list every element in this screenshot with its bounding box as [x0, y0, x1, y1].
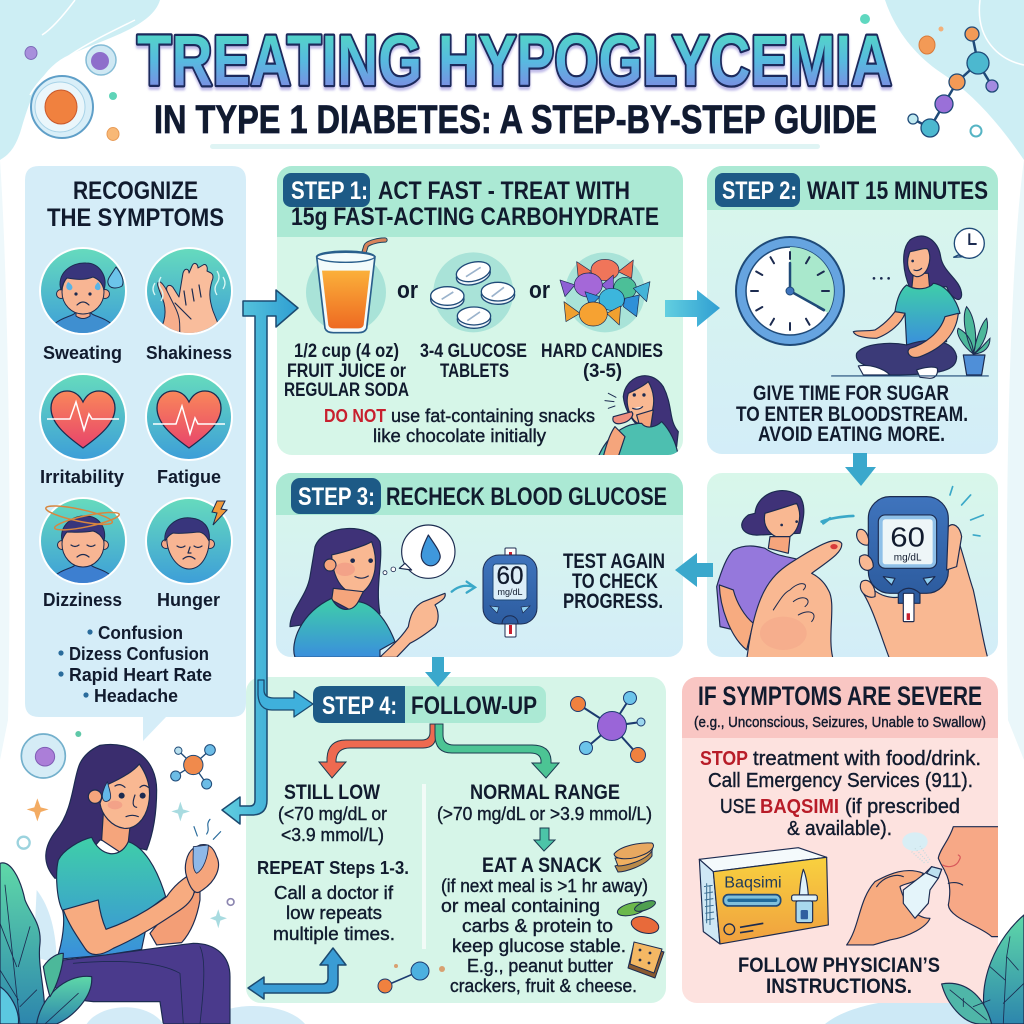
- column: normal range: NORMAL RANGE: [470, 781, 620, 804]
- arrow: still low branch: [319, 724, 436, 778]
- heading: step 1: [291, 177, 659, 231]
- caption: step 3: TO CHECK: [572, 570, 658, 593]
- icon: sweating: [40, 248, 126, 341]
- arrow: step 3 down to step 4: [425, 657, 451, 687]
- arrow: symptoms to step 1 with long connector: [222, 290, 298, 824]
- caption: step 2: GIVE TIME FOR SUGAR: [753, 382, 949, 405]
- text: or: [397, 277, 550, 304]
- column: normal range: carbs & protein to: [462, 916, 613, 936]
- heading: severe symptoms: [694, 681, 986, 731]
- column: normal range: keep glucose stable.: [452, 936, 626, 956]
- icon: irritability heart: [40, 374, 126, 460]
- arrow: repeat loop: [248, 948, 346, 999]
- panel: step 4 follow-up: [246, 677, 666, 1003]
- heading: recognize the symptoms: THE SYMPTOMS: [47, 204, 224, 232]
- arrow: connector to step 4: [258, 680, 313, 717]
- badge: step 2: [715, 173, 800, 207]
- bullet list of other symptoms: [58, 623, 212, 706]
- heading: step 2: WAIT 15 MINUTES: [807, 177, 988, 205]
- instructions: severe: (if prescribed: [845, 796, 960, 818]
- badge: step 4: [313, 686, 546, 723]
- illustration: pricking finger and reading meter: mg/dL: [894, 553, 922, 564]
- icon: fruit and cheese: [616, 898, 661, 936]
- instructions: severe: [700, 748, 981, 840]
- icon: molecule: [570, 692, 646, 762]
- warning: do not use fat snacks: [324, 406, 595, 446]
- illustration: Baqsimi box: [699, 848, 828, 944]
- icon: cracker: [628, 942, 664, 978]
- symptom labels: Irritability: [40, 467, 124, 487]
- badge: step 2: STEP 2:: [722, 177, 797, 205]
- column: still low: [257, 781, 409, 944]
- caption: follow physician's instructions: FOLLOW PHYSICIAN’S: [738, 954, 940, 977]
- column: still low: low repeats: [286, 903, 382, 923]
- arrow: finger prick to step 3: [675, 553, 713, 587]
- instructions: severe: STOP: [700, 748, 748, 770]
- column: normal range: EAT A SNACK: [482, 854, 602, 877]
- caption: follow physician's instructions: INSTRUCTIONS.: [766, 975, 912, 998]
- column: still low: REPEAT Steps 1-3.: [257, 858, 409, 878]
- panel: recognize the symptoms: [25, 166, 246, 741]
- text: or: or: [529, 277, 550, 304]
- column: still low: STILL LOW: [284, 781, 380, 804]
- icon: clock: [736, 237, 844, 345]
- bullet list of other symptoms: Dizess Confusion: [69, 644, 209, 664]
- food option labels: (3-5): [583, 361, 622, 382]
- badge: step 4: FOLLOW-UP: [411, 692, 537, 720]
- warning: do not use fat snacks: use fat-containing snacks: [391, 406, 595, 426]
- column: still low: <3.9 mmol/L): [281, 825, 384, 845]
- panel: finger prick and meter reading: [707, 473, 998, 660]
- column: normal range: E.g., peanut butter: [467, 956, 613, 976]
- heading: severe symptoms: (e.g., Unconscious, Seizures, Unable to Swallow): [694, 714, 986, 731]
- column: still low: multiple times.: [273, 924, 395, 944]
- illustration: pricking finger and reading meter: 60: [890, 522, 925, 553]
- panel: severe symptoms: [682, 677, 1000, 1003]
- illustration: bottom-right leaves: [942, 915, 1024, 1024]
- arrow: step 2 down to finger prick: [845, 453, 876, 486]
- badge: step 4: STEP 4:: [322, 692, 397, 720]
- caption: follow physician's instructions: [738, 954, 940, 998]
- symptom labels: Shakiness: [146, 343, 232, 363]
- icon: sandwich snack: [614, 843, 654, 872]
- badge: step 3: [291, 478, 381, 514]
- icon: glucose meter: mg/dL: [497, 587, 523, 597]
- panel: step 1: [277, 166, 683, 457]
- illustration: worried woman checking glucose: [0, 731, 234, 1024]
- icon: shakiness: [146, 248, 232, 341]
- illustration: Baqsimi box: Baqsimi: [724, 874, 782, 891]
- warning: do not use fat snacks: DO NOT: [324, 406, 386, 426]
- title: IN TYPE 1 DIABETES: A STEP-BY-STEP GUIDE: [154, 98, 877, 142]
- icon: hunger: [146, 498, 232, 584]
- symptom labels: Fatigue: [157, 467, 221, 487]
- food option labels: 3-4 GLUCOSE: [420, 341, 527, 362]
- arrow: step 1 to step 2: [665, 290, 720, 327]
- arrow: small down to snack: [534, 828, 555, 851]
- column: still low: Call a doctor if: [274, 883, 394, 903]
- title: [137, 22, 892, 142]
- food option labels: 1/2 cup (4 oz): [294, 341, 399, 362]
- decorative molecule: top right: [860, 14, 998, 137]
- panel: step 2: [707, 166, 998, 454]
- food option labels: HARD CANDIES: [541, 341, 663, 362]
- column: normal range: crackers, fruit & cheese.: [450, 976, 637, 996]
- column: normal range: (if next meal is >1 hr away): [441, 876, 648, 896]
- bullet list of other symptoms: Headache: [94, 686, 178, 706]
- illustration: pricking finger and reading meter: [717, 487, 988, 660]
- icon: glucose tablets: [431, 252, 515, 332]
- instructions: severe: & available).: [787, 818, 892, 840]
- symptom labels: Dizziness: [43, 590, 122, 610]
- warning: do not use fat snacks: like chocolate initially: [373, 426, 546, 446]
- symptom labels: Sweating: [43, 343, 122, 363]
- symptom labels: Hunger: [157, 590, 220, 610]
- icon: small molecule: [378, 962, 445, 993]
- caption: step 2: TO ENTER BLOODSTREAM.: [736, 403, 968, 426]
- instructions: severe: Call Emergency Services (911).: [708, 770, 973, 792]
- badge: step 3: STEP 3:: [298, 483, 375, 511]
- icon: fruit juice: [306, 240, 386, 333]
- food option labels: FRUIT JUICE or: [287, 361, 407, 382]
- food option labels: REGULAR SODA: [284, 380, 409, 401]
- icon: fatigue heart: [146, 374, 232, 460]
- instructions: severe: BAQSIMI: [760, 796, 839, 818]
- heading: step 1: ACT FAST - TREAT WITH: [378, 177, 630, 205]
- caption: step 2: [736, 382, 968, 446]
- food option labels: [284, 341, 663, 401]
- column: normal range: (>70 mg/dL or >3.9 mmol/L): [437, 804, 652, 824]
- heading: step 3: RECHECK BLOOD GLUCOSE: [386, 483, 667, 511]
- icon: dizziness: [40, 498, 126, 591]
- badge: step 1: STEP 1:: [291, 177, 368, 205]
- heading: recognize the symptoms: RECOGNIZE: [73, 177, 198, 205]
- panel: step 3: [276, 473, 683, 657]
- column: still low: (<70 mg/dL or: [278, 804, 387, 824]
- instructions: severe: USE: [720, 796, 756, 818]
- icon: glucose meter: 60: [496, 562, 524, 590]
- heading: step 1: 15g FAST-ACTING CARBOHYDRATE: [291, 203, 659, 231]
- illustration: nasal spray in use: [847, 827, 1000, 945]
- icon: glucose meter: [483, 548, 537, 637]
- caption: step 2: AVOID EATING MORE.: [758, 423, 945, 446]
- badge: step 1: [283, 173, 370, 207]
- caption: step 3: [563, 550, 665, 613]
- text: or: or: [397, 277, 418, 304]
- food option labels: TABLETS: [440, 361, 509, 382]
- illustration: woman waiting calmly: [832, 228, 990, 378]
- symptom labels: [40, 343, 232, 610]
- column: normal range: [437, 781, 652, 996]
- caption: step 3: PROGRESS.: [563, 590, 663, 613]
- illustration: woman eating: [598, 376, 678, 457]
- illustration: woman pointing at meter: [290, 525, 475, 657]
- heading: recognize the symptoms: [47, 177, 224, 232]
- bullet list of other symptoms: Rapid Heart Rate: [69, 665, 212, 685]
- icon: hard candies: [560, 252, 650, 332]
- instructions: severe: treatment with food/drink.: [753, 748, 981, 770]
- caption: step 3: TEST AGAIN: [563, 550, 665, 573]
- bullet list of other symptoms: Confusion: [98, 623, 183, 643]
- arrow: normal range branch: [435, 724, 559, 778]
- decorative cells and molecules: top left: [25, 45, 119, 140]
- column: normal range: or meal containing: [441, 896, 600, 916]
